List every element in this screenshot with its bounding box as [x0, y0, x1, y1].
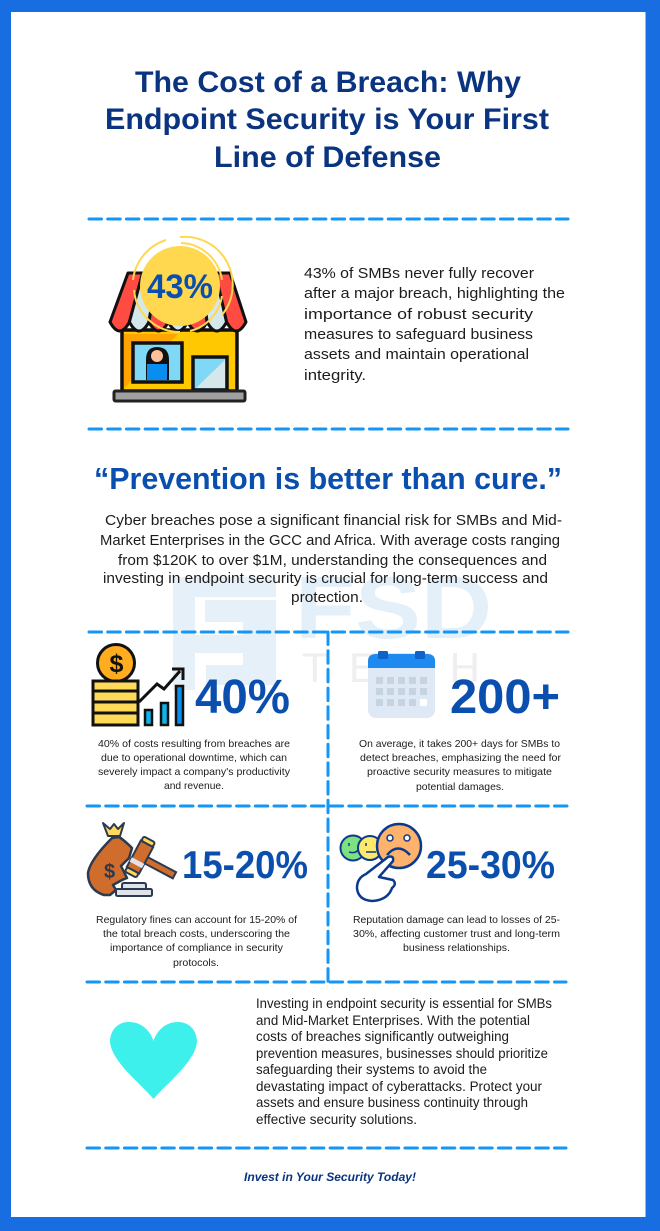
- icon: money bag and gavel: $: [104, 861, 115, 883]
- text: 43% statement: integrity.: [304, 368, 366, 384]
- icon: calendar: [368, 651, 435, 718]
- stat: 40%: 40%: [195, 671, 290, 724]
- text: fines: the total breach costs, underscoring the: [103, 928, 290, 940]
- text: detection: [359, 738, 562, 793]
- text: downtime: severely impact a company's productivity: [98, 766, 291, 778]
- intro paragraph: [100, 513, 562, 606]
- text: 43% statement: after a major breach, highlighting the: [304, 286, 565, 302]
- text: detection: detect breaches, emphasizing the need for: [360, 752, 562, 764]
- watermark logo: FSD: [295, 558, 492, 657]
- title: The Cost of a Breach: Why: [135, 66, 522, 99]
- icon: coins and growth chart: [93, 644, 183, 725]
- footer tagline: Invest in Your Security Today!: [244, 1170, 416, 1184]
- text: downtime: 40% of costs resulting from breaches are: [98, 738, 290, 750]
- icon: storefront with 43% badge: [110, 237, 246, 401]
- closing paragraph: prevention measures, businesses should prioritize: [256, 1046, 548, 1061]
- icon: storefront with 43% badge: 43%: [147, 268, 213, 306]
- text: fines: Regulatory fines can account for 15-20% of: [96, 914, 297, 926]
- text: 43% statement: importance of robust security: [304, 307, 534, 323]
- text: fines: [96, 914, 297, 969]
- icon: coins and growth chart: $: [110, 650, 124, 678]
- panel: operational downtime: [93, 644, 291, 792]
- watermark logo: TECH: [302, 644, 480, 691]
- title: Endpoint Security is Your First: [105, 103, 549, 136]
- text: downtime: and revenue.: [164, 780, 224, 792]
- intro paragraph: Market Enterprises in the GCC and Africa. With average costs ranging: [100, 533, 560, 549]
- panel: regulatory fines: [88, 823, 308, 969]
- icon: money bag and gavel: [88, 823, 184, 896]
- title: Line of Defense: [214, 141, 441, 174]
- closing paragraph: safeguarding their systems to avoid the: [256, 1062, 487, 1077]
- intro paragraph: from $120K to over $1M, understanding the consequences and: [118, 553, 547, 569]
- text: reputation: [353, 914, 560, 954]
- panel: reputation damage: [340, 824, 560, 954]
- closing paragraph: and Mid-Market Enterprises. With the potential: [256, 1013, 530, 1028]
- text: 43% statement: measures to safeguard business: [304, 327, 533, 343]
- text: 43% statement: assets and maintain operational: [304, 347, 529, 363]
- intro paragraph: Cyber breaches pose a significant financial risk for SMBs and Mid-: [105, 513, 562, 529]
- text: fines: protocols.: [173, 957, 219, 969]
- icon: feedback faces and pointing hand: [340, 824, 421, 901]
- text: downtime: due to operational downtime, which can: [101, 752, 287, 764]
- text: 43% statement: [304, 266, 565, 384]
- panel: detection time: [359, 651, 562, 793]
- title: [105, 66, 549, 174]
- closing paragraph: Investing in endpoint security is essential for SMBs: [256, 996, 552, 1011]
- heading: quote: “Prevention is better than cure.”: [94, 461, 562, 496]
- intro paragraph: investing in endpoint security is crucial for long-term success and: [103, 571, 548, 587]
- text: downtime: [98, 738, 291, 792]
- closing paragraph: effective security solutions.: [256, 1112, 417, 1127]
- text: detection: potential damages.: [416, 781, 504, 793]
- text: 43% statement: 43% of SMBs never fully recover: [304, 266, 534, 282]
- closing paragraph: costs of breaches significantly outweighing: [256, 1029, 509, 1044]
- stat: 200+: 200+: [450, 671, 560, 724]
- text: detection: On average, it takes 200+ days for SMBs to: [359, 738, 560, 750]
- icon: heart: [110, 1022, 197, 1099]
- intro paragraph: protection.: [291, 590, 363, 606]
- text: reputation: Reputation damage can lead to losses of 25-: [353, 914, 560, 926]
- stat: 25-30%: 25-30%: [426, 844, 555, 887]
- stat: 15-20%: 15-20%: [182, 844, 308, 887]
- watermark logo: [173, 558, 492, 691]
- closing paragraph: assets and ensure business continuity through: [256, 1095, 528, 1110]
- closing paragraph: [256, 996, 552, 1127]
- text: fines: importance of compliance in security: [110, 942, 284, 954]
- closing paragraph: devastating impact of cyberattacks. Protect your: [256, 1079, 542, 1094]
- text: detection: proactive security measures to mitigate: [367, 766, 552, 778]
- text: reputation: business relationships.: [403, 942, 510, 954]
- text: reputation: 30%, affecting customer trust and long-term: [353, 928, 560, 940]
